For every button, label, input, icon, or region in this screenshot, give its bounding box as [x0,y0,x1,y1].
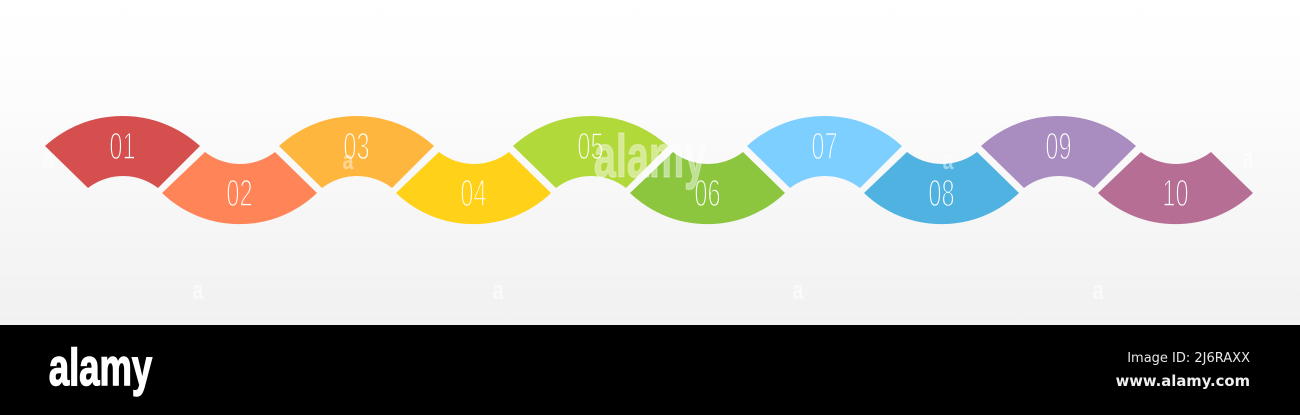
central watermark: alamy [594,123,706,190]
small watermarks: a [943,145,954,175]
background panel [0,0,1300,325]
segment 04: 04 [460,171,487,214]
website: www.alamy.com [1116,373,1250,390]
footer bar [0,325,1300,415]
wave chain of ten numbered segments [45,116,1253,224]
image id: Image ID: 2J6RAXX [1127,351,1250,366]
segment 04 [396,152,551,224]
segment 09: 09 [1045,124,1072,167]
segment 02 [162,152,317,224]
small watermarks: a [193,275,204,305]
segment 06 [630,152,785,224]
small watermarks: a [793,275,804,305]
footer logo: alamy [49,337,152,397]
segment 10 [1098,152,1253,224]
segment 05: 05 [577,124,604,167]
small watermarks: a [43,143,54,173]
small watermarks: a [493,275,504,305]
segment 09 [981,116,1136,188]
segment 02: 02 [226,171,253,214]
segment 01 [45,116,200,188]
segment 07 [747,116,902,188]
small watermarks: a [1093,275,1104,305]
segment 10: 10 [1162,171,1189,214]
segment 08 [864,152,1019,224]
segment 01: 01 [109,124,136,167]
small watermarks: a [343,145,354,175]
small watermarks: a [1243,143,1254,173]
segment 06: 06 [694,171,721,214]
segment 07: 07 [811,124,838,167]
segment 05 [513,116,668,188]
segment 03 [279,116,434,188]
segment 03: 03 [343,124,370,167]
segment 08: 08 [928,171,955,214]
small watermarks [43,143,1254,305]
